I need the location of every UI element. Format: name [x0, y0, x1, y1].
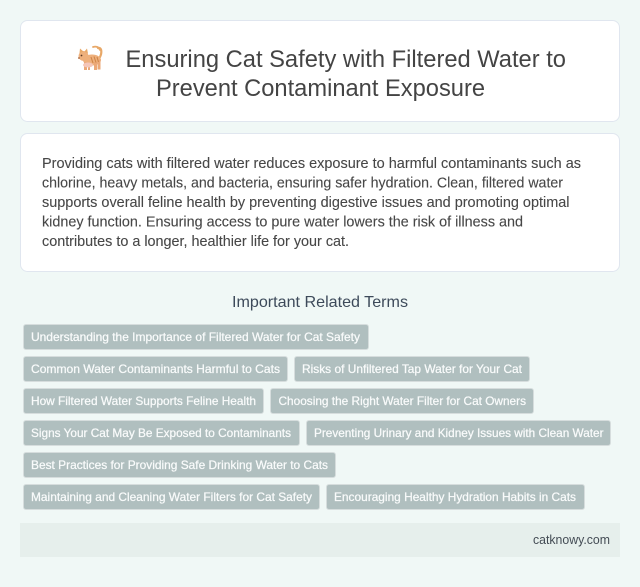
- text block: description paragraph: [42, 156, 581, 250]
- tag: [294, 356, 530, 382]
- tag: [24, 356, 288, 382]
- tag: [24, 452, 336, 478]
- tag: Common Water Contaminants Harmful to Cats: [31, 362, 280, 376]
- tag: [24, 388, 264, 414]
- footer source text: catknowy.com: [533, 532, 610, 547]
- tag: Best Practices for Providing Safe Drinking Water to Cats: [31, 458, 328, 472]
- tag: How Filtered Water Supports Feline Health: [31, 394, 256, 408]
- tag: [270, 388, 534, 414]
- tag: [326, 484, 584, 510]
- tag: Maintaining and Cleaning Water Filters for Cat Safety: [31, 490, 312, 504]
- title: [126, 46, 566, 102]
- text block: description paragraph: kidney function. Ensuring access to pure water lowers the risk of illness and: [42, 214, 523, 230]
- tag: Encouraging Healthy Hydration Habits in Cats: [334, 490, 576, 504]
- tag: [306, 420, 610, 446]
- panel: description: [20, 134, 620, 272]
- tag: [24, 484, 320, 510]
- tag: Signs Your Cat May Be Exposed to Contaminants: [31, 426, 291, 440]
- heading: related terms: Important Related Terms: [232, 294, 408, 311]
- tag group: related terms: [24, 324, 610, 510]
- tag: [24, 324, 368, 350]
- text block: description paragraph: chlorine, heavy metals, and bacteria, ensuring safer hydration. Clean, filtered water: [42, 176, 563, 192]
- footer: [20, 523, 620, 557]
- text block: description paragraph: supports overall feline health by preventing digestive issues and promoting optimal: [42, 195, 570, 211]
- tag: [24, 420, 300, 446]
- title: Ensuring Cat Safety with Filtered Water to: [126, 46, 566, 73]
- tag: Choosing the Right Water Filter for Cat Owners: [278, 394, 526, 408]
- tag: Preventing Urinary and Kidney Issues with Clean Water: [314, 426, 604, 440]
- title: Prevent Contaminant Exposure: [156, 75, 485, 102]
- text block: description paragraph: contributes to a longer, healthier life for your cat.: [42, 234, 349, 250]
- tag: Risks of Unfiltered Tap Water for Your Cat: [302, 362, 523, 376]
- text block: description paragraph: Providing cats with filtered water reduces exposure to harmful contaminants such as: [42, 156, 581, 172]
- panel: title card: [20, 20, 620, 122]
- tag: Understanding the Importance of Filtered Water for Cat Safety: [31, 330, 360, 344]
- icon: orange cat: [78, 47, 101, 70]
